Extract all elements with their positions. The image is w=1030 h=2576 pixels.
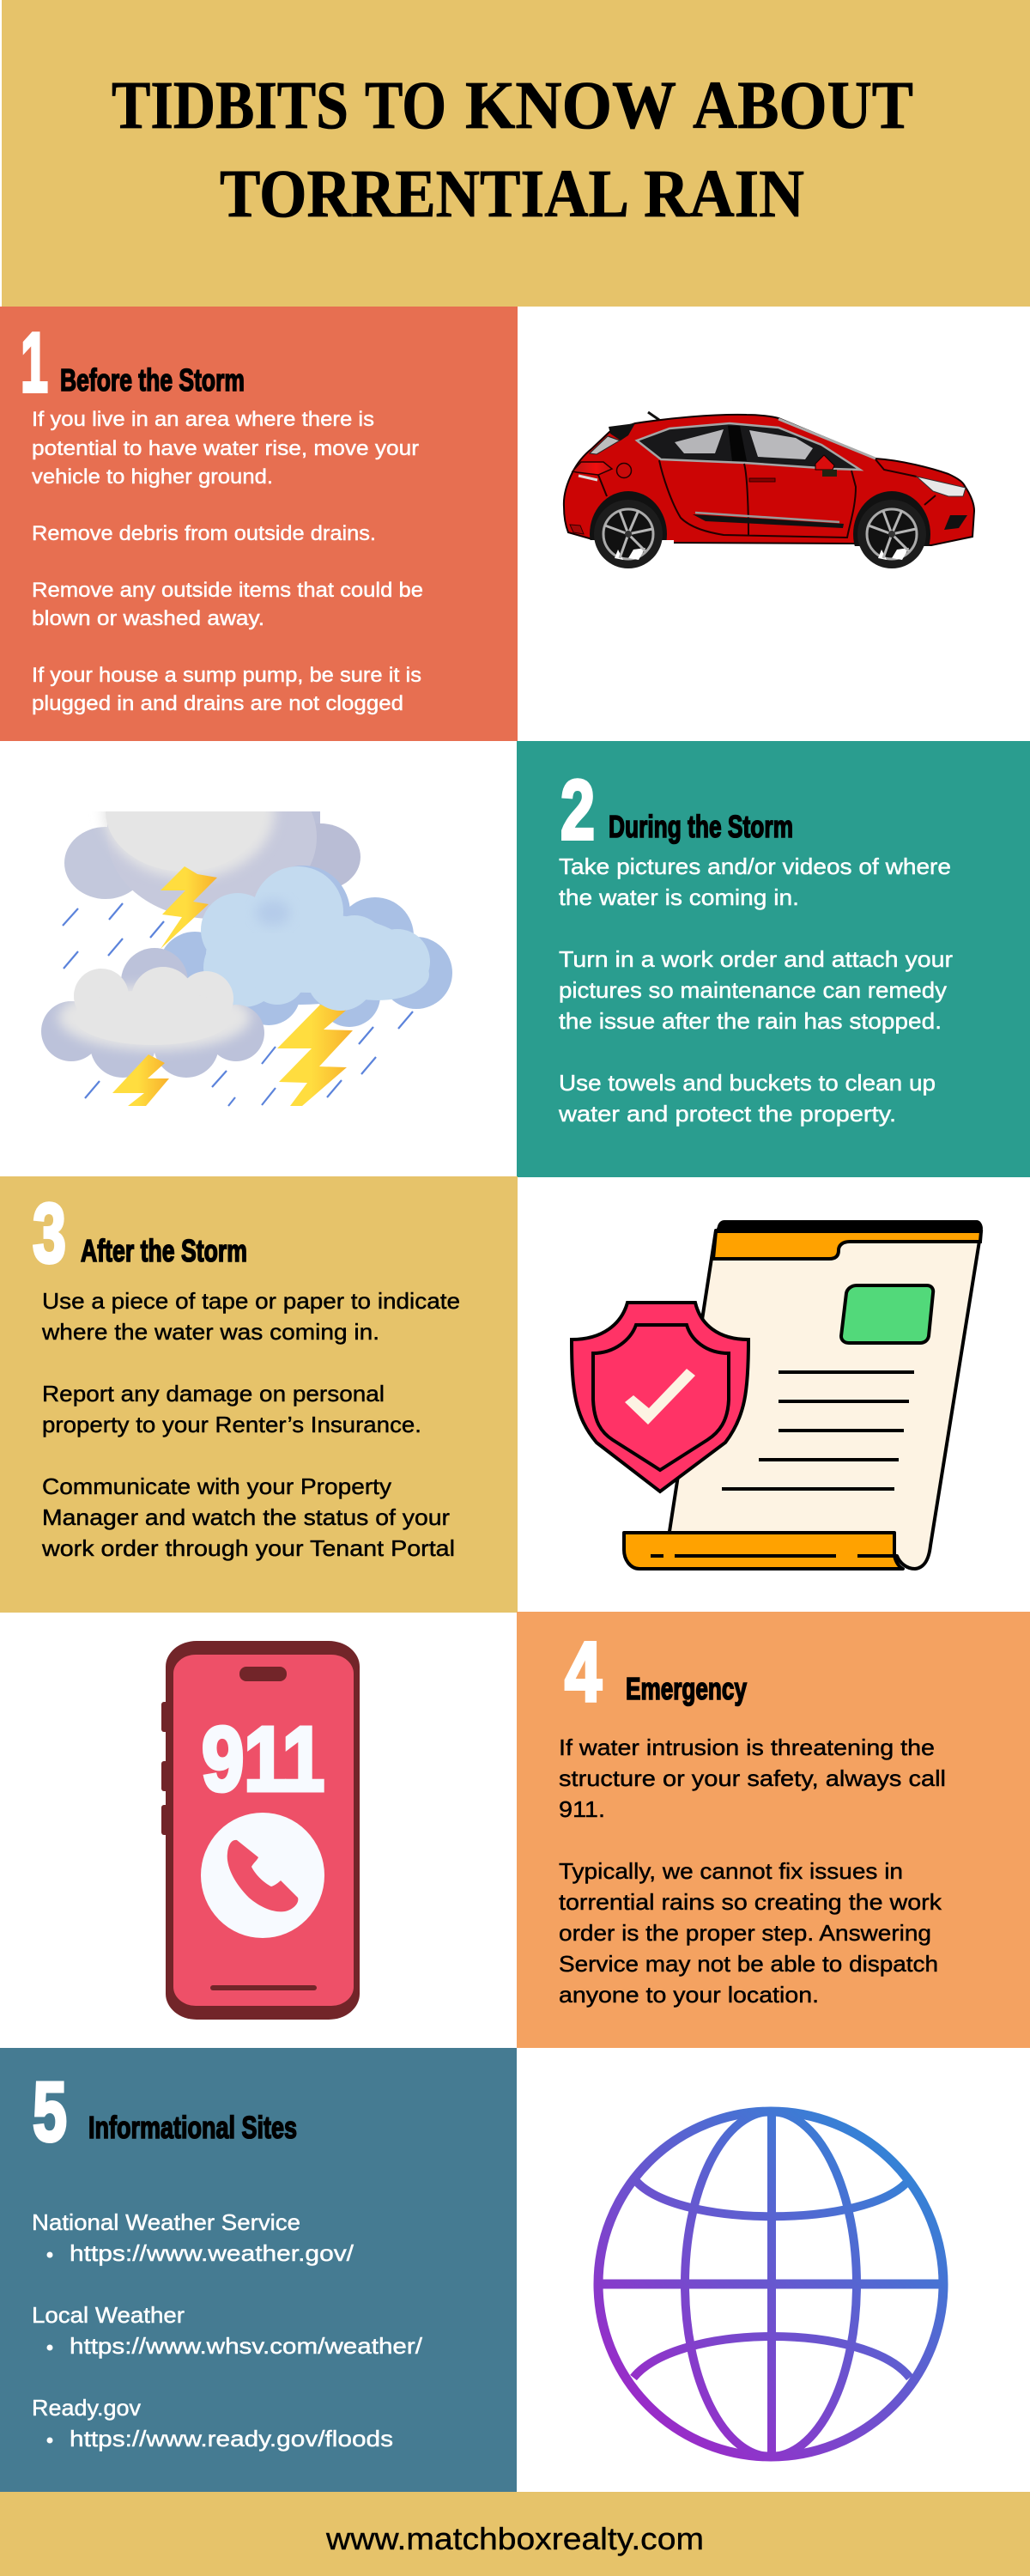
scroll footer band [624,1533,903,1569]
number 4: 4 [565,1625,602,1719]
heading: before the storm: Before the Storm [60,362,245,398]
footer dashes [651,1554,894,1558]
check mark [625,1369,695,1425]
site list: https://www.ready.gov/floods [70,2426,393,2451]
text: during the storm tips: pictures so maintenance can remedy [559,977,947,1003]
document top band [716,1220,983,1231]
911 label: 911 [202,1709,324,1810]
icon: insurance document with shield [572,1220,983,1569]
number 5: 5 [33,2064,67,2159]
text: before the storm tips: blown or washed away. [32,607,264,630]
text: emergency guidance: If water intrusion is threatening the [559,1735,935,1760]
document folder tab [713,1231,981,1259]
rain streaks [63,903,413,1106]
heading: informational sites: Informational Sites [88,2110,297,2145]
text: during the storm tips: Turn in a work order and attach your [559,946,953,972]
text: during the storm tips: Take pictures and/or videos of where [559,854,951,879]
text: after the storm tips [41,1288,460,1561]
shield [572,1303,748,1492]
title: ABOUT [693,69,913,143]
text: before the storm tips: Remove any outside items that could be [32,579,423,602]
text: after the storm tips: Use a piece of tape or paper to indicate [42,1288,460,1314]
heading: emergency: Emergency [626,1671,747,1706]
text: during the storm tips: water and protect the property. [558,1101,896,1127]
text: during the storm tips: Use towels and buckets to clean up [559,1070,936,1096]
icon: phone dialing 911 [161,1641,360,2020]
text: before the storm tips: plugged in and drains are not clogged [32,692,403,715]
text: after the storm tips: Report any damage on personal [42,1381,385,1406]
text: after the storm tips: Manager and watch the status of your [42,1504,450,1530]
text: before the storm tips: vehicle to higher ground. [32,465,273,489]
footer website: www.matchboxrealty.com [325,2521,704,2556]
text: emergency guidance: torrential rains so creating the work [559,1889,942,1915]
text: during the storm tips: the water is coming in. [559,884,799,910]
blue cloud [159,866,452,1106]
document page [669,1230,981,1569]
title [112,69,913,232]
text: during the storm tips: the issue after the rain has stopped. [559,1008,942,1034]
number 3: 3 [33,1186,66,1280]
panel: during the storm [517,741,1030,1177]
text: emergency guidance: 911. [559,1796,605,1822]
document lines [722,1372,914,1489]
title: TIDBITS [112,69,348,143]
icon: storm clouds with lightning and rain [41,811,452,1107]
site list: https://www.whsv.com/weather/ [70,2333,423,2359]
title: KNOW [465,69,676,143]
number 1: 1 [21,315,48,410]
phone side buttons [161,1702,168,1835]
site list: https://www.weather.gov/ [70,2240,354,2266]
back storm cloud [64,811,360,919]
green label [841,1285,933,1343]
text: after the storm tips: property to your Renter’s Insurance. [42,1412,421,1437]
lightning bolt: small [112,1054,169,1106]
header banner [2,0,1030,307]
grey cloud [41,948,264,1078]
site list: Local Weather [32,2302,185,2328]
heading: during the storm: During the Storm [609,809,793,844]
text: emergency guidance: structure or your safety, always call [559,1765,946,1791]
lightning bolt: top [161,866,217,949]
text: after the storm tips: Communicate with your Property [42,1473,391,1499]
text: before the storm tips: Remove debris from outside drains. [32,522,376,545]
panel: after the storm [0,1176,518,1613]
text: before the storm tips: If you live in an area where there is [32,408,374,431]
text: emergency guidance: anyone to your location. [559,1982,819,2008]
text: before the storm tips [32,408,423,715]
call button [201,1813,324,1938]
wheel: front [857,500,926,568]
title: TORRENTIAL [220,157,629,232]
footer banner [0,2492,1030,2576]
icon: red car [564,412,974,579]
site list: Ready.gov [32,2395,141,2421]
text: emergency guidance [559,1735,946,2008]
number 2: 2 [560,762,595,857]
panel: informational sites [0,2048,517,2492]
text: before the storm tips: If your house a sump pump, be sure it is [32,664,421,687]
site list [32,2209,423,2451]
text: emergency guidance: Typically, we cannot fix issues in [559,1858,903,1884]
heading: after the storm: After the Storm [81,1233,247,1268]
title: TO [365,69,446,143]
text: during the storm tips [558,854,953,1127]
site list: National Weather Service [32,2209,300,2235]
text: emergency guidance: Service may not be able to dispatch [559,1951,938,1977]
text: after the storm tips: work order through your Tenant Portal [41,1535,455,1561]
text: before the storm tips: potential to have water rise, move your [32,437,419,460]
icon: globe [598,2111,943,2457]
lightning bolt: large [277,1005,353,1106]
wheel: rear [594,500,663,568]
title: RAIN [644,157,804,232]
text: after the storm tips: where the water was coming in. [41,1319,379,1345]
panel: emergency [517,1612,1030,2048]
text: emergency guidance: order is the proper step. Answering [559,1920,931,1946]
panel: before the storm [0,307,518,741]
